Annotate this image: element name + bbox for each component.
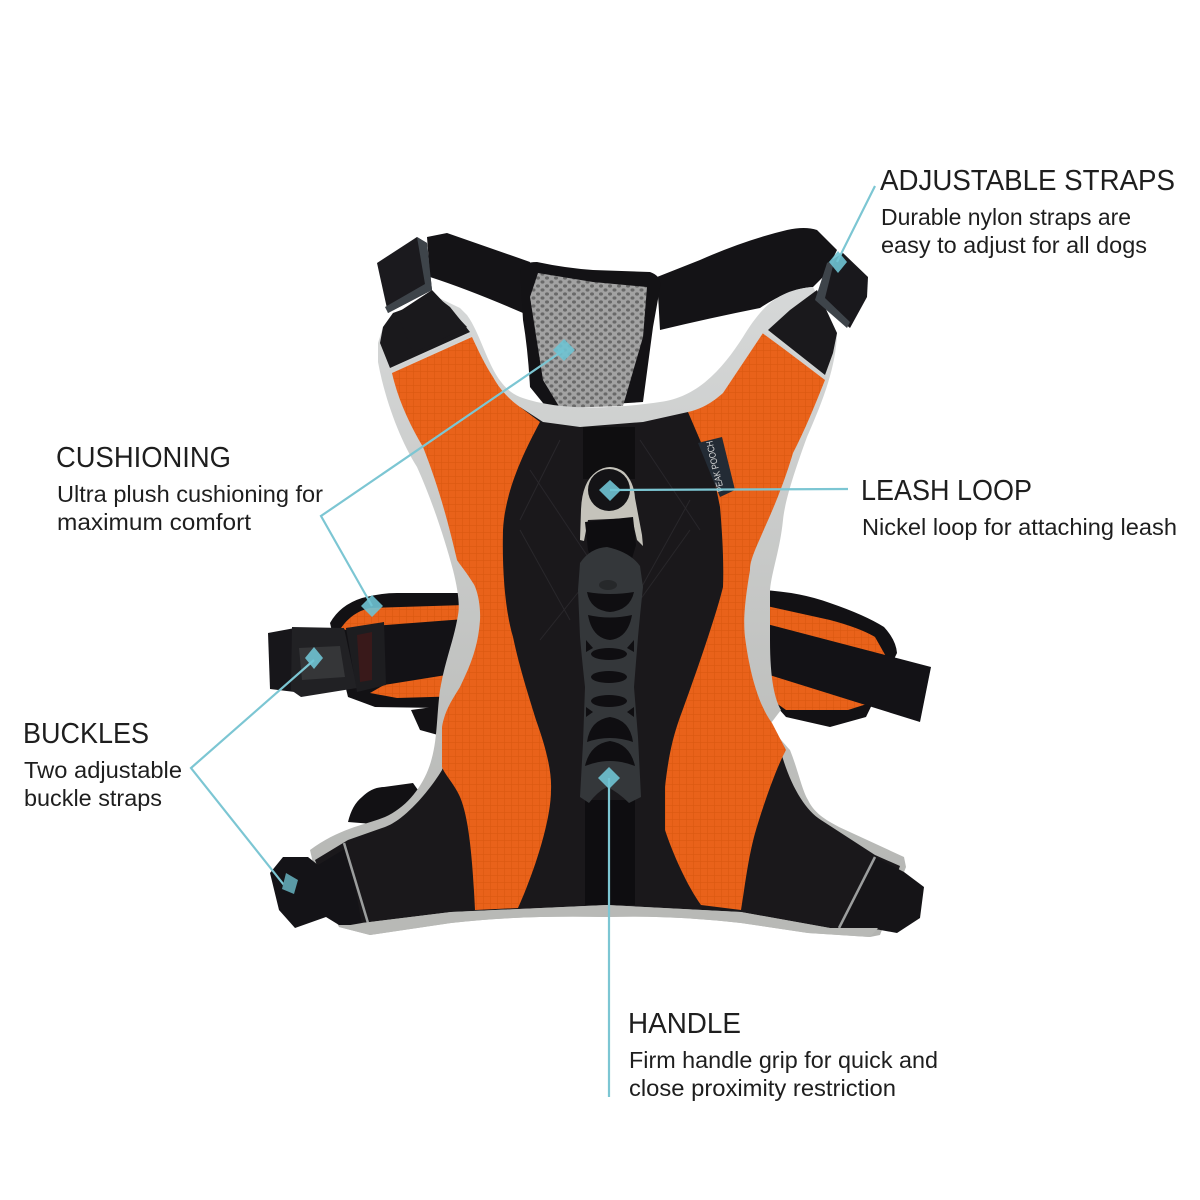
callout markers [282, 251, 847, 894]
reflective piping stripes [344, 332, 875, 928]
side strap wings [330, 590, 897, 825]
callout: adjustable straps: ADJUSTABLE STRAPS [880, 165, 1175, 197]
callout: handle: Firm handle grip for quick and [629, 1047, 938, 1073]
callout: leash loop: LEASH LOOP [861, 475, 1032, 507]
callout: handle: close proximity restriction [629, 1075, 896, 1101]
callout: adjustable straps [880, 165, 1175, 258]
callout: buckles: buckle straps [24, 785, 162, 811]
callout: leash loop [861, 475, 1177, 540]
panel: orange right [665, 333, 825, 910]
icon: handle grip [578, 547, 643, 803]
callout: buckles: BUCKLES [23, 718, 149, 750]
callout: cushioning: Ultra plush cushioning for [57, 481, 323, 507]
callout lines [191, 186, 875, 1097]
callout: adjustable straps: Durable nylon straps are [881, 204, 1131, 230]
callout: adjustable straps: easy to adjust for all dogs [881, 232, 1147, 258]
callout: buckles: Two adjustable [24, 757, 182, 783]
panel: orange left [392, 337, 551, 910]
quilting stitches [520, 440, 700, 640]
icon: right shoulder buckle [815, 253, 868, 328]
icon: left shoulder buckle [377, 237, 467, 353]
vest reflective body [310, 287, 906, 937]
callout: handle: HANDLE [628, 1008, 741, 1040]
handle slots [585, 580, 635, 766]
callout: leash loop: Nickel loop for attaching leash [862, 514, 1177, 540]
icon: leash loop [580, 467, 643, 572]
mesh cushion [520, 262, 660, 408]
bottom reflective band [339, 905, 878, 937]
side strap webbing [346, 619, 931, 722]
label tag: PEAK POOCH [704, 440, 727, 493]
side strap padding [341, 605, 888, 710]
icon: side buckle [268, 622, 386, 697]
callout: cushioning: CUSHIONING [56, 442, 231, 474]
callout: handle [628, 1008, 938, 1101]
top straps [427, 228, 837, 330]
vertical webbing [583, 427, 635, 905]
harness illustration [268, 228, 931, 937]
black body panels [315, 407, 900, 928]
shoulder black panels [380, 290, 837, 375]
callout: cushioning: maximum comfort [57, 509, 252, 535]
callout: buckles [23, 718, 182, 811]
lower straps [270, 847, 924, 933]
callout: cushioning [56, 442, 323, 535]
label tag [698, 437, 735, 497]
